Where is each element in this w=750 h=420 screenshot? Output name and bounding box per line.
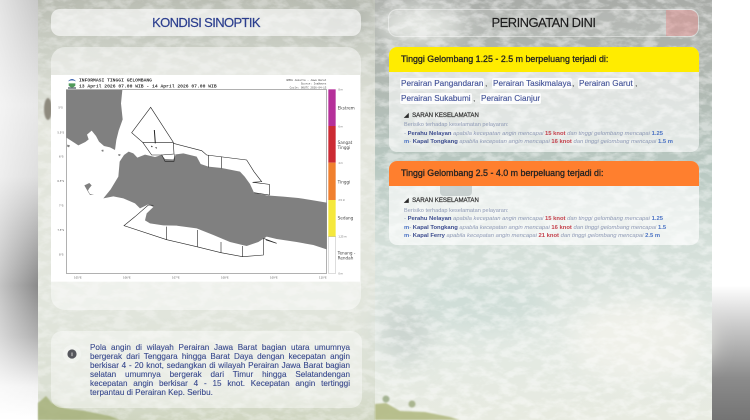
- advice intro: Berisiko terhadap keselamatan pelayaran:: [404, 208, 508, 214]
- land masses: [66, 90, 327, 249]
- water area tag: Perairan Cianjur: [481, 94, 540, 103]
- colour legend: 1.25 m: [338, 236, 347, 239]
- colour legend: Tinggi: [337, 145, 350, 150]
- colour legend: 0 m: [338, 272, 344, 275]
- latitude and longitude labels: 5.5°S: [57, 130, 65, 134]
- latitude and longitude labels: 108°E: [221, 275, 229, 279]
- colour legend: [328, 89, 356, 275]
- water area tag: Perairan Tasikmalaya: [493, 79, 571, 88]
- latitude and longitude labels: 6°S: [59, 155, 64, 159]
- synoptic wind text: Pola angin di wilayah Perairan Jawa Barat bagian utara umumnya: [90, 343, 350, 352]
- header text: Tinggi Gelombang 2.5 - 4.0 m berpeluang terjadi di:: [401, 168, 603, 178]
- map source note: Source: InaWaves: [301, 82, 327, 86]
- map title: [79, 80, 217, 89]
- colour legend: 4 m: [338, 162, 344, 165]
- advice heading: ◢ SARAN KESELAMATAN: [404, 112, 479, 119]
- latitude and longitude labels: 6.5°S: [57, 179, 65, 183]
- colour legend: Sedang: [338, 216, 354, 221]
- advice line: - Perahu Nelayan apabila kecepatan angin mencapai 15 knot dan tinggi gelombang mencapai 1.25: [404, 216, 663, 222]
- water area tag: Perairan Sukabumi: [401, 94, 471, 103]
- synoptic wind text: [90, 343, 350, 397]
- map source note: BMKG Jakarta - Jawa Barat: [286, 78, 327, 82]
- synoptic wind text: berkisar 4 - 20 knot, sedangkan di wilayah Perairan Jawa Barat bagian: [90, 361, 350, 370]
- latitude and longitude labels: 105°E: [74, 275, 82, 279]
- safety advice: second warning: [404, 197, 666, 239]
- advice line: m- Kapal Tongkang apabila kecepatan angin mencapai 16 knot dan tinggi gelombang mencapai 1.5 m: [404, 139, 673, 145]
- water area tag: Perairan Garut: [579, 79, 633, 88]
- colour legend: 6 m: [338, 125, 344, 128]
- affected waters list: [400, 78, 637, 104]
- safety advice: first warning: [404, 112, 673, 145]
- warning icon tint: [666, 10, 698, 36]
- comma: ,: [572, 78, 574, 88]
- latitude and longitude labels: [57, 106, 327, 279]
- colour legend: Rendah: [338, 256, 354, 261]
- colour legend: Ekstrem: [338, 106, 355, 111]
- heading panel: peringatan dini: [388, 9, 699, 37]
- yellow header: [389, 47, 699, 72]
- advice line: m- Kapal Ferry apabila kecepatan angin mencapai 21 knot dan tinggi gelombang mencapai 2.5 m: [404, 233, 660, 239]
- latitude and longitude labels: 7°S: [59, 204, 64, 208]
- advice line: m- Kapal Tongkang apabila kecepatan angin mencapai 16 knot dan tinggi gelombang mencapai 1.5: [404, 225, 666, 231]
- map title: 13 April 2026 07.00 WIB - 14 April 2026 07.00 WIB: [79, 84, 217, 89]
- latitude and longitude labels: 106°E: [123, 275, 131, 279]
- heading panel: kondisi sinoptik: [51, 9, 361, 36]
- wave height forecast map: [51, 75, 360, 282]
- water area tag: Perairan Pangandaran: [401, 79, 483, 88]
- panel: wave warning 1.25 to 2.5 m: [389, 47, 699, 152]
- comma: ,: [473, 93, 475, 103]
- heading text: KONDISI SINOPTIK: [152, 15, 260, 30]
- map source note: [286, 78, 327, 89]
- latitude and longitude labels: 8°S: [59, 253, 64, 257]
- icon: information: [67, 349, 77, 359]
- panel: synoptic wind description: [51, 331, 362, 408]
- empty list placeholder: [440, 186, 472, 196]
- synoptic wind text: kecepatan angin berkisar 4 - 15 knot. Kecepatan angin tertinggi: [90, 379, 350, 388]
- comma: ,: [635, 78, 637, 88]
- synoptic wind text: terpantau di Perairan Kep. Seribu.: [90, 388, 213, 397]
- synoptic wind text: selatan umumnya bergerak dari Timur hingga Selatandengan: [90, 370, 350, 379]
- comma: ,: [485, 78, 487, 88]
- panel: wave height map: [51, 47, 361, 310]
- colour legend: Sangat: [338, 140, 353, 145]
- latitude and longitude labels: 107°E: [172, 275, 180, 279]
- header text: Tinggi Gelombang 1.25 - 2.5 m berpeluang terjadi di:: [401, 54, 608, 64]
- map logo: [68, 79, 76, 89]
- forecast zones: [124, 107, 277, 257]
- panel: wave warning 2.5 to 4.0 m: [389, 161, 699, 245]
- advice intro: Berisiko terhadap keselamatan pelayaran:: [404, 122, 508, 128]
- colour legend: Tinggi: [337, 179, 350, 184]
- synoptic wind text: bergerak dari Tenggara hingga Barat Daya dengan kecepatan angin: [90, 352, 350, 361]
- latitude and longitude labels: 5°S: [58, 106, 63, 110]
- map source note: Cycle: 00UTC 2026-04-13: [290, 85, 327, 89]
- latitude and longitude labels: 109°E: [270, 275, 278, 279]
- colour legend: Tenang -: [337, 251, 356, 256]
- advice heading: ◢ SARAN KESELAMATAN: [404, 197, 479, 204]
- latitude and longitude labels: 7.5°S: [57, 228, 65, 232]
- advice line: - Perahu Nelayan apabila kecepatan angin mencapai 15 knot dan tinggi gelombang mencapai 1.25: [404, 131, 663, 137]
- map title: INFORMASI TINGGI GELOMBANG: [79, 80, 153, 84]
- heading text: PERINGATAN DINI: [492, 15, 595, 30]
- map frame: [66, 90, 327, 273]
- colour legend: 2.5 m: [338, 199, 346, 202]
- colour legend: 8 m: [338, 89, 344, 92]
- orange header: [389, 161, 699, 186]
- latitude and longitude labels: 110°E: [319, 275, 327, 279]
